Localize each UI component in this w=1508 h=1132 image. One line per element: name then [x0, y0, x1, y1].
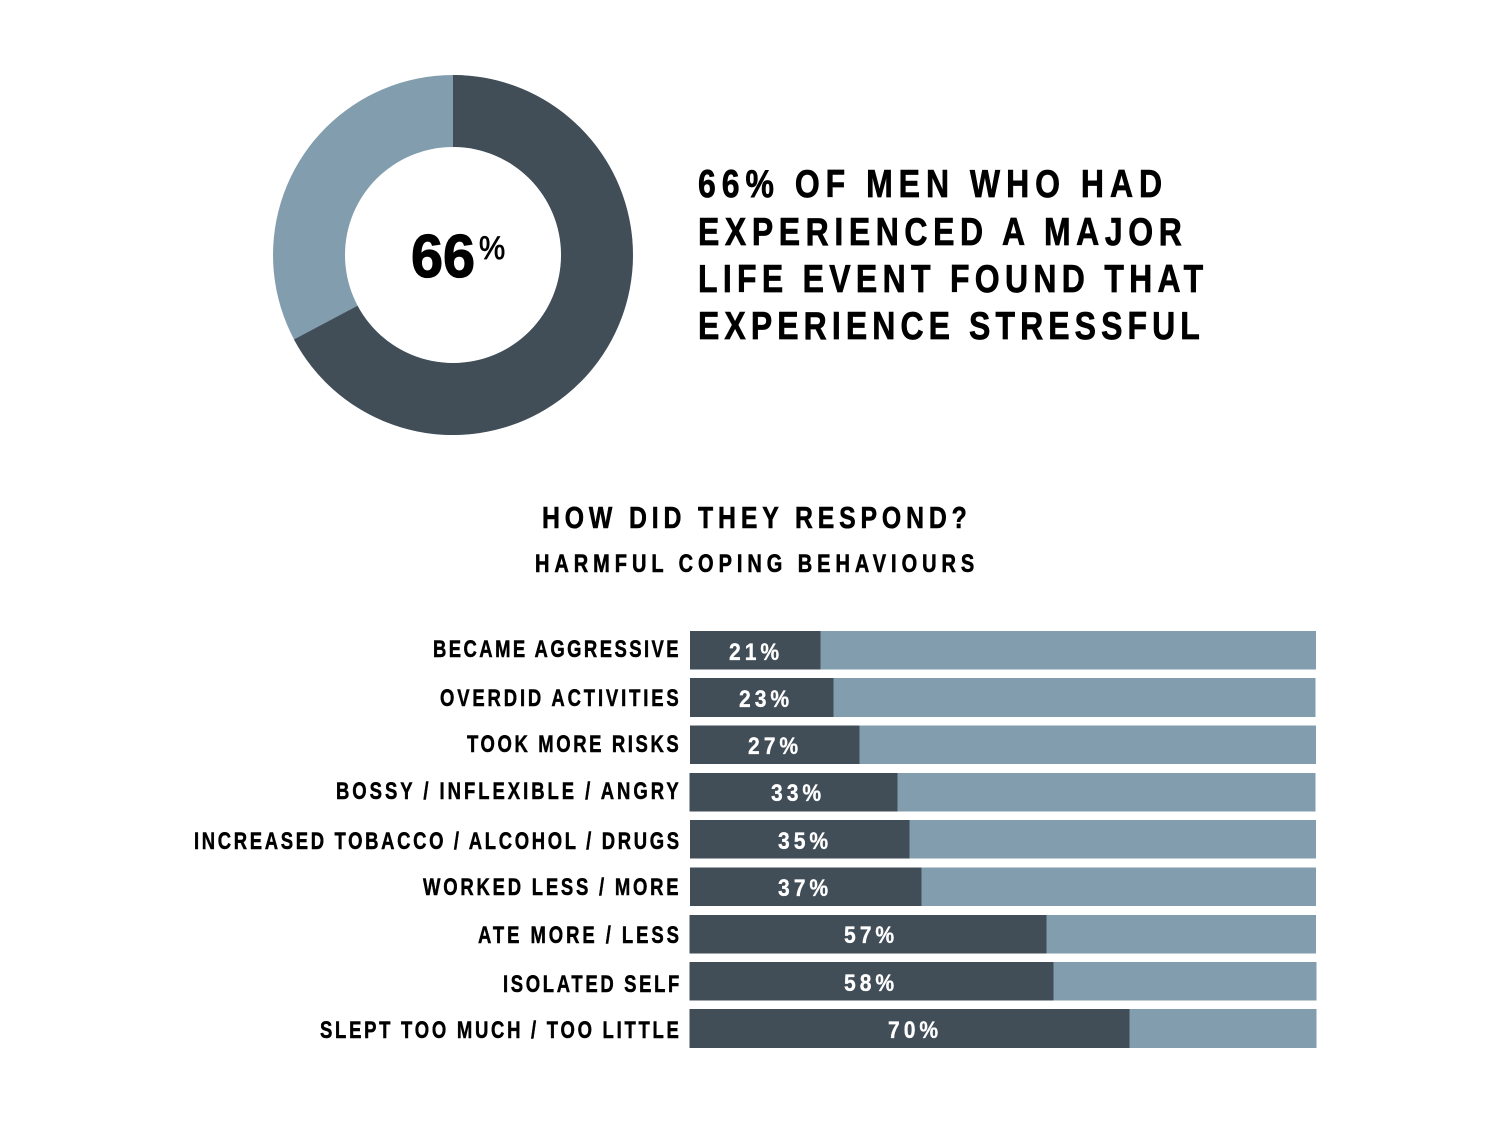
row: isolated self 58%: ISOLATED SELF: [503, 971, 679, 998]
row: increased tobacco alcohol drugs 35%: [194, 820, 1316, 858]
row: slept too much too little 70%: 70%: [888, 1017, 938, 1043]
donut centre value: [411, 224, 505, 290]
subheading: harmful coping behaviours: HARMFUL COPING BEHAVIOURS: [535, 550, 974, 578]
heading: main statement: 66% OF MEN WHO HAD: [698, 162, 1162, 206]
bar chart: coping behaviours: [194, 631, 1316, 1048]
row: overdid activities 23%: 23%: [739, 686, 789, 712]
row: bossy inflexible angry 33%: [336, 773, 1316, 812]
row: increased tobacco alcohol drugs 35%: INCREASED TOBACCO / ALCOHOL / DRUGS: [194, 828, 679, 855]
row: took more risks 27%: 27%: [748, 733, 798, 759]
row: isolated self 58%: 58%: [844, 970, 894, 996]
row: overdid activities 23%: OVERDID ACTIVITIES: [440, 685, 679, 712]
row: took more risks 27%: TOOK MORE RISKS: [467, 731, 679, 758]
heading: main statement: [698, 162, 1203, 348]
subheading: how did they respond: HOW DID THEY RESPOND?: [542, 500, 967, 535]
row: ate more less 57%: 57%: [844, 922, 894, 948]
row: overdid activities 23%: [440, 678, 1316, 717]
row: slept too much too little 70%: SLEPT TOO MUCH / TOO LITTLE: [320, 1017, 679, 1044]
heading: main statement: EXPERIENCED A MAJOR: [698, 210, 1182, 254]
row: became aggressive 21%: 21%: [729, 639, 779, 665]
row: bossy inflexible angry 33%: 33%: [771, 780, 821, 806]
row: worked less more 37%: 37%: [778, 875, 828, 901]
row: bossy inflexible angry 33%: BOSSY / INFLEXIBLE / ANGRY: [336, 778, 679, 805]
row: isolated self 58%: [503, 962, 1316, 1000]
row: became aggressive 21%: BECAME AGGRESSIVE: [433, 636, 679, 663]
row: ate more less 57%: [478, 915, 1316, 954]
donut centre value: %: [479, 230, 505, 266]
row: ate more less 57%: ATE MORE / LESS: [478, 922, 679, 949]
row: took more risks 27%: [467, 726, 1316, 764]
row: increased tobacco alcohol drugs 35%: 35%: [778, 828, 828, 854]
row: worked less more 37%: WORKED LESS / MORE: [423, 874, 679, 901]
donut centre value: 66: [411, 224, 475, 290]
row: worked less more 37%: [423, 868, 1316, 906]
row: slept too much too little 70%: [320, 1009, 1316, 1048]
row: became aggressive 21%: [433, 631, 1316, 670]
heading: main statement: LIFE EVENT FOUND THAT: [698, 257, 1203, 301]
donut chart: 66%: [273, 75, 633, 435]
heading: main statement: EXPERIENCE STRESSFUL: [698, 304, 1200, 348]
